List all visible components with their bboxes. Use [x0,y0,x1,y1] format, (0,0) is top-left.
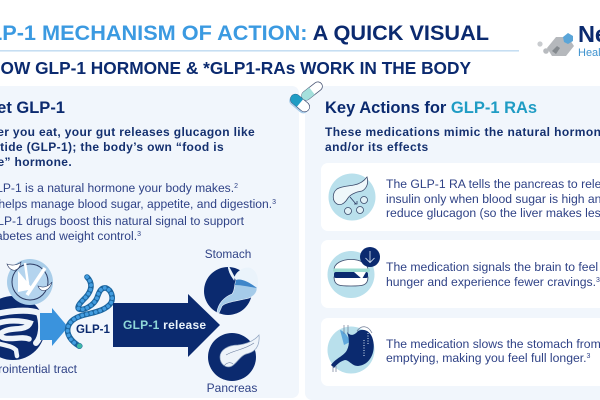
card text: 3 [587,353,591,360]
arrow: gut to GLP-1 [40,308,68,346]
logo [537,21,600,59]
intro text: These medications mimic the natural hormone [325,125,600,139]
panel: key actions [305,86,600,400]
panel heading: Key Actions for GLP-1 RAs [325,99,537,117]
icon: stomach [204,265,258,315]
arrow: GLP-1 release: GLP-1 release [123,318,206,332]
card text [386,337,600,365]
card text: 3 [596,277,600,284]
card text: hunger and experience fewer cravings. [386,275,596,289]
intro text: and/or its effects [325,140,429,154]
card text: emptying, making you feel full longer. [386,351,587,365]
intro text [0,125,255,169]
bullet list: 3 [137,231,141,238]
icon: down arrow badge [360,247,380,267]
card text [386,177,600,220]
subtitle: HOW GLP-1 HORMONE & *GLP1-RAs WORK IN THE BODY [0,58,471,78]
bullet list [0,181,276,243]
card text [386,260,600,289]
label: stomach: Stomach [205,247,251,261]
icon: burger [328,251,374,298]
arrow: GLP-1 release [113,294,220,357]
icon: gut [0,296,45,360]
icon: pancreas with cells [328,174,376,220]
card text: The medication slows the stomach from [386,337,600,351]
icon: GLP-1 peptide chain [68,277,112,349]
icon: capsules [287,80,324,115]
icon: plate and cutlery [7,259,53,305]
icon: pancreas [208,333,259,381]
card: stomach action [321,318,600,386]
label: GLP-1: GLP-1 [76,324,110,336]
panel: meet GLP-1 [0,86,299,398]
bullet list: 3 [272,199,276,206]
card: brain action [321,240,600,308]
icon: stomach [328,325,374,374]
bullet list: 2 [234,183,238,190]
card: pancreas action [321,163,600,231]
intro text [325,125,600,154]
label: pancreas: Pancreas [207,381,257,395]
